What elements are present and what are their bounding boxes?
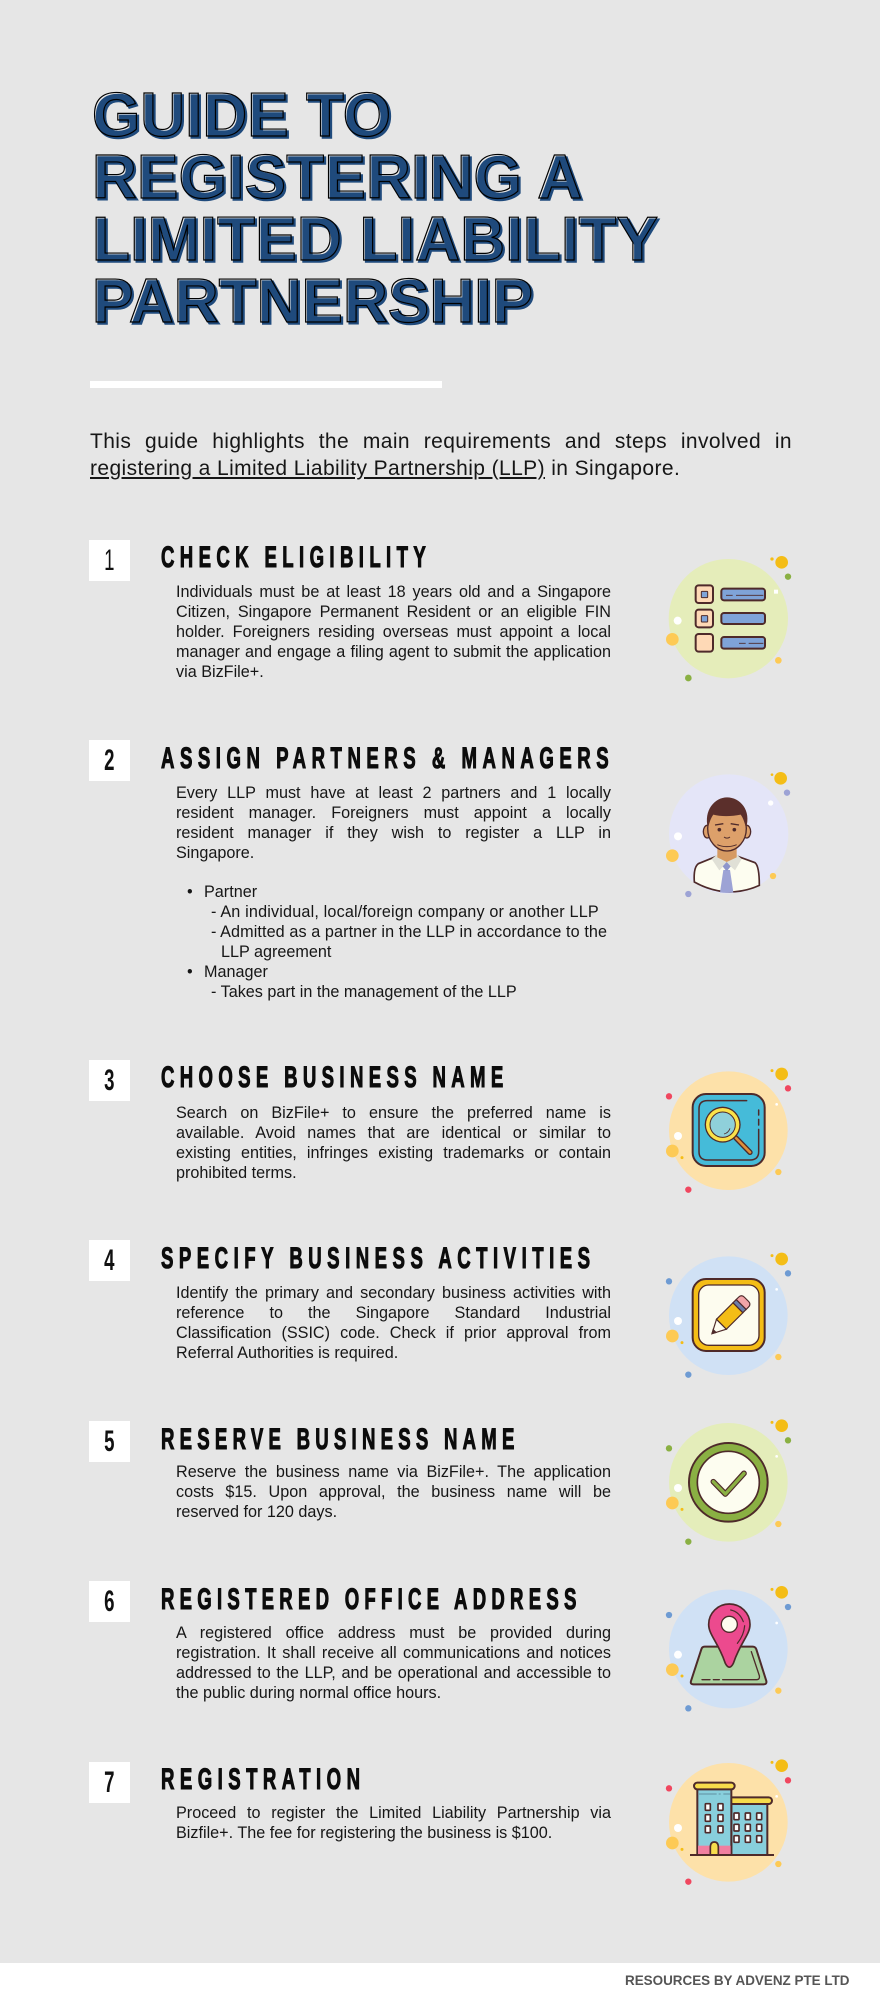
panel: step 3 choose business name [89,1060,792,1193]
icon: magnifying glass [666,1068,792,1193]
title: PARTNERSHIP [94,269,535,338]
title: GUIDE TO [92,81,391,150]
step number 1: 1 [104,544,115,577]
title: REGISTERING A [92,143,582,212]
text block: business name search: existing entities, infringes existing trademarks or contain [176,1144,611,1162]
step number 3 [89,1060,130,1101]
text block: reserving the name: Reserve the business name via BizFile+. The application [176,1463,611,1481]
text block: registration fee: Bizfile+. The fee for registering the business is $100. [176,1824,552,1842]
text block: office address: the public during normal office hours. [176,1684,441,1702]
title: LIMITED LIABILITY [92,205,658,274]
intro text: registering a Limited Liability Partnership (LLP) in Singapore. [90,456,680,480]
step number 6: 6 [104,1585,115,1618]
text block: business name search: available. Avoid names that are identical or similar to [176,1124,611,1142]
title: LIMITED LIABILITY [92,205,658,274]
icon: pencil note [666,1252,792,1378]
heading: registration: REGISTRATION [161,1763,360,1796]
list: partner and manager roles: • [187,963,193,981]
panel: step 4 specify business activities [89,1240,792,1378]
text block: eligibility: via BizFile+. [176,663,264,681]
heading: choose business name: CHOOSE BUSINESS NAME [161,1061,503,1094]
title: REGISTERING A [92,143,582,212]
list: partner and manager roles: Manager [204,963,268,981]
step number 3: 3 [104,1064,115,1097]
title underline bar [90,381,442,388]
text block: business name search: prohibited terms. [176,1164,297,1182]
text block: reserving the name [176,1463,611,1521]
icon: checklist [666,556,792,682]
heading: check eligibility: CHECK ELIGIBILITY [161,541,426,574]
panel: step 5 reserve business name [89,1419,792,1545]
text block: registration fee: Proceed to register the Limited Liability Partnership via [176,1804,611,1822]
list: partner and manager roles: - Takes part in the management of the LLP [211,983,517,1001]
panel: step 6 registered office address [89,1581,792,1712]
footer credit: RESOURCES BY ADVENZ PTE LTD [625,1973,849,1988]
title: REGISTERING A [94,145,584,214]
step number 4 [89,1240,130,1281]
text block: office address: addressed to the LLP, and be operational and accessible to [176,1664,611,1682]
intro text: This guide highlights the main requirements and steps involved in [90,430,792,453]
text block: office address [176,1624,611,1702]
text block: eligibility [176,583,611,681]
list: partner and manager roles: Partner [204,883,257,901]
text block: eligibility: manager and engage a filing agent to submit the application [176,643,611,661]
text block: business name search: Search on BizFile+ to ensure the preferred name is [176,1104,611,1122]
panel: step 7 registration [89,1759,792,1885]
text block: business activities: Classification (SSIC) code. Check if prior approval from [176,1324,611,1342]
text block: partner requirements: resident manager if they wish to register a LLP in [176,824,611,842]
text block: partner requirements [176,784,611,862]
list: partner and manager roles: • [187,883,193,901]
panel: step 2 assign partners and managers [89,740,790,1001]
text block: eligibility: holder. Foreigners residing overseas must appoint a local [176,623,611,641]
step number 5 [89,1421,130,1462]
title: PARTNERSHIP [92,267,533,336]
step number 6 [89,1581,130,1622]
panel: step 1 check eligibility [89,540,792,682]
icon: map pin [666,1586,792,1712]
list: partner and manager roles: - An individual, local/foreign company or another LLP [211,903,599,921]
text block: business activities: Identify the primary and secondary business activities with [176,1284,611,1302]
text block: office address: A registered office address must be provided during [176,1624,611,1642]
step number 4: 4 [104,1244,115,1277]
title: PARTNERSHIP [92,267,533,336]
icon: businessman [666,772,790,898]
text block: office address: registration. It shall receive all communications and notices [176,1644,611,1662]
text block: business activities: reference to the Singapore Standard Industrial [176,1304,611,1322]
text block: registration fee [176,1804,611,1842]
footer band [0,1963,880,2000]
list: partner and manager roles: LLP agreement [221,943,331,961]
list: partner and manager roles: - Admitted as a partner in the LLP in accordance to the [211,923,607,941]
step number 2 [89,740,130,781]
step number 7 [89,1762,130,1803]
text block: eligibility: Individuals must be at least 18 years old and a Singapore [176,583,611,601]
title: LIMITED LIABILITY [94,207,660,276]
text block: business name search [176,1104,611,1182]
heading: specify business activities: SPECIFY BUSINESS ACTIVITIES [161,1242,590,1275]
heading: assign partners and managers: ASSIGN PARTNERS & MANAGERS [161,742,609,775]
text block: reserving the name: costs $15. Upon approval, the business name will be [176,1483,611,1501]
step number 2: 2 [104,744,115,777]
heading: registered office address: REGISTERED OFFICE ADDRESS [161,1583,576,1616]
title [92,81,660,338]
text block: business activities: Referral Authorities is required. [176,1344,398,1362]
text block: reserving the name: reserved for 120 days. [176,1503,337,1521]
text block: partner requirements: Every LLP must have at least 2 partners and 1 locally [176,784,611,802]
step number 1 [89,540,130,581]
text block: business activities [176,1284,611,1362]
intro text [90,430,792,480]
list: partner and manager roles [187,883,607,1001]
text block: partner requirements: Singapore. [176,844,254,862]
icon: office building [666,1759,792,1885]
step number 7: 7 [104,1766,115,1799]
text block: eligibility: Citizen, Singapore Permanent Resident or an eligible FIN [176,603,611,621]
heading: reserve business name: RESERVE BUSINESS NAME [161,1423,514,1456]
icon: check mark [666,1419,792,1545]
text block: partner requirements: resident manager. Foreigners must appoint a locally [176,804,611,822]
title: GUIDE TO [92,81,391,150]
step number 5: 5 [104,1425,115,1458]
title: GUIDE TO [94,83,393,152]
